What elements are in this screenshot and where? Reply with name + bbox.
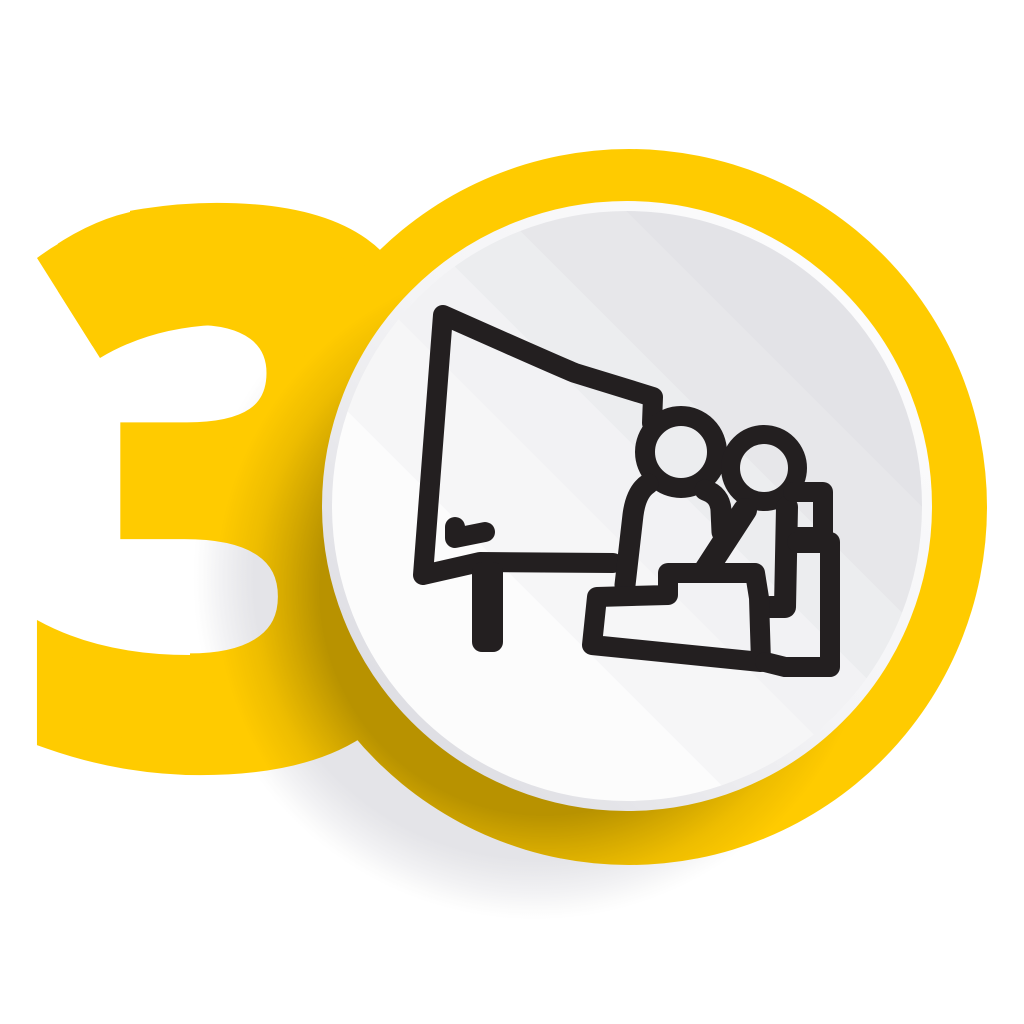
person two body [706,510,745,570]
person two head [730,434,798,502]
right box [765,492,830,667]
person one head [645,416,717,488]
monitor stand [472,562,503,652]
person two back [770,507,787,607]
person one body [625,484,722,585]
infographic: number 30 badge [36,149,987,902]
screen mark [455,527,485,538]
monitor screen [423,315,653,575]
box divider [795,527,825,553]
icon: people at a monitor [423,315,830,667]
shadow on yellow [237,326,813,865]
desk [592,573,761,662]
digit 0 ring [271,149,987,865]
grey drop shadow [193,236,877,920]
white disc [327,206,927,806]
digit 3: 3 [6,85,470,920]
